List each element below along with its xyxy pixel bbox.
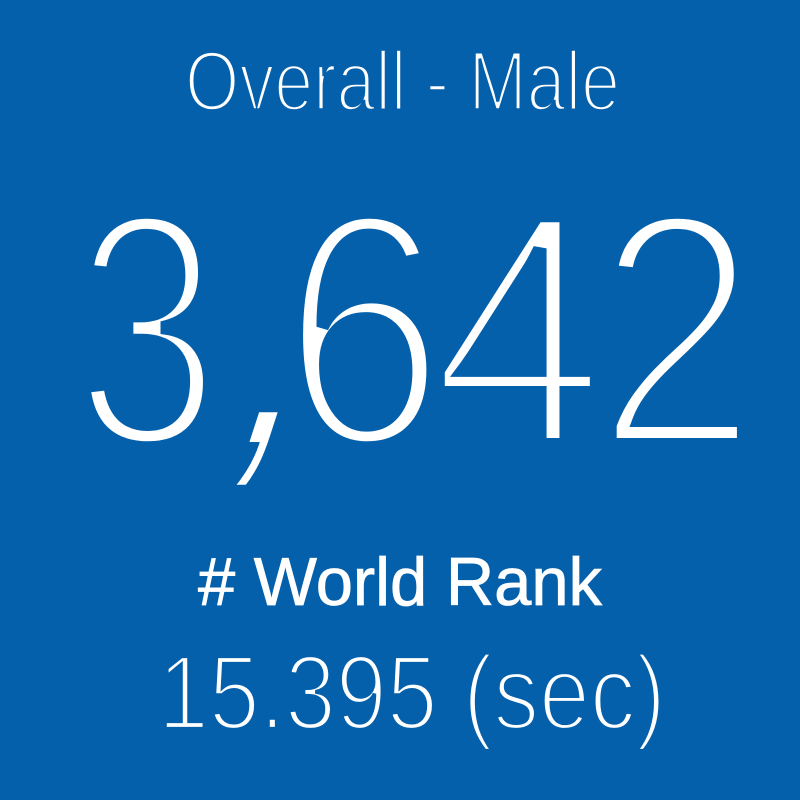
title: Overall - Male xyxy=(185,34,620,128)
big number: rank value: 2 xyxy=(596,144,758,516)
big number: rank value: 3 xyxy=(75,144,220,516)
big number: rank value xyxy=(75,142,758,516)
label: world rank: # World Rank xyxy=(198,544,603,620)
big number: rank value: , xyxy=(201,143,389,516)
time value: 15.395 (sec) xyxy=(158,634,666,752)
big number: rank value: 6 xyxy=(282,142,445,516)
big number: rank value: 4 xyxy=(431,143,606,516)
